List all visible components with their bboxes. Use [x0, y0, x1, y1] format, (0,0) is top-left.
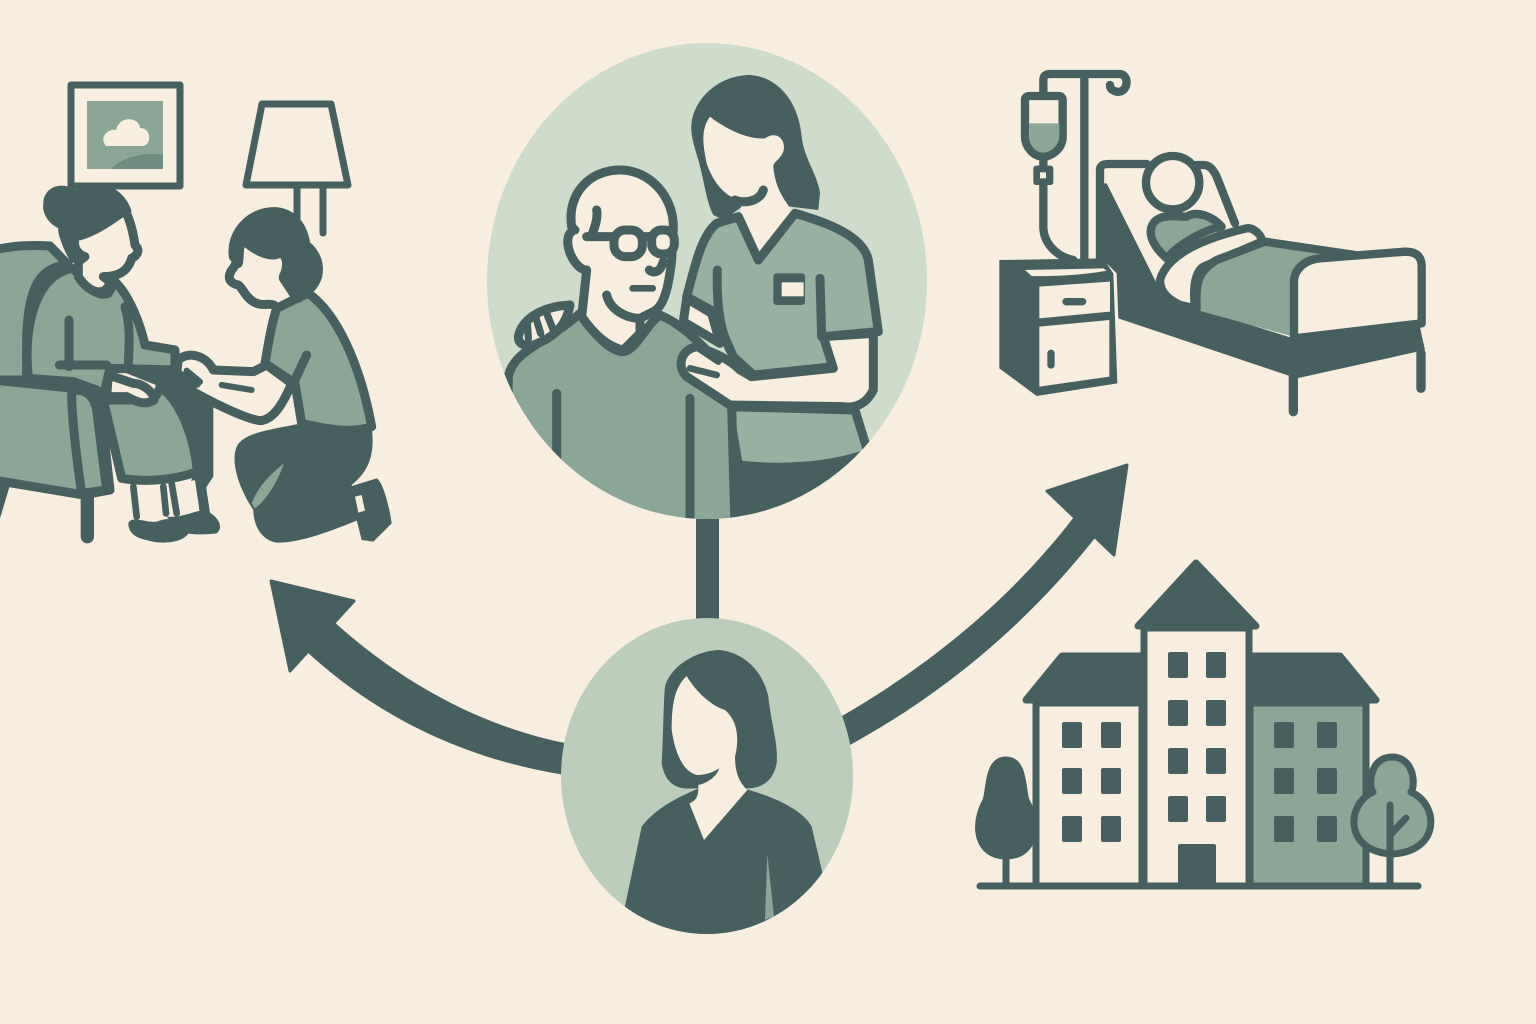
patient shirt lines	[557, 393, 690, 527]
caregiver shirt highlight	[765, 854, 774, 920]
caregiver arm and hand	[177, 355, 292, 421]
icon: IV stand	[1025, 74, 1127, 260]
armchair	[0, 245, 110, 537]
nurse arm behind patient	[683, 298, 720, 343]
glasses	[614, 230, 674, 257]
caregiver trousers	[235, 423, 373, 543]
illustration: hospital bed scene	[999, 74, 1425, 412]
nurse face and neck	[703, 117, 793, 260]
nurse trousers	[734, 454, 858, 518]
central tower	[1138, 563, 1256, 886]
ground line	[980, 882, 1418, 890]
caregiver body	[620, 788, 823, 940]
connector: caregiver to patient circle	[696, 500, 719, 630]
illustration: home care scene	[0, 184, 392, 543]
nurse scrub top	[687, 213, 878, 375]
arrow: toward home care	[271, 581, 565, 775]
seated woman skirt	[103, 387, 197, 480]
blanket fold	[1160, 228, 1262, 308]
icon: left tree	[977, 758, 1035, 886]
building wings and roof	[1026, 656, 1376, 886]
windows	[1062, 652, 1337, 842]
caregiver hair	[233, 212, 318, 298]
patient shirt	[507, 313, 735, 527]
icon: framed picture	[71, 85, 180, 186]
panel: patient and nurse circle	[487, 43, 927, 527]
patient face details	[587, 210, 663, 318]
caregiver sleeve line	[293, 355, 307, 383]
patient head	[568, 170, 673, 350]
footboard	[1294, 252, 1422, 338]
icon: bedside table	[999, 258, 1117, 396]
panel: caregiver circle	[561, 618, 853, 940]
seated woman hand	[107, 375, 154, 403]
nurse front arm	[681, 333, 873, 407]
shirt and sleeve lines	[59, 307, 129, 367]
seated woman hair	[43, 184, 132, 263]
seated woman dark lap	[110, 367, 213, 513]
hand detail lines	[187, 371, 252, 390]
seated woman legs	[133, 480, 205, 520]
caregiver face and neck	[672, 676, 747, 840]
illustration: care home building	[977, 563, 1431, 886]
seated woman shirt	[27, 268, 175, 397]
patient body	[1151, 214, 1222, 258]
nurse chin line	[735, 190, 763, 202]
caregiver hair	[662, 650, 777, 789]
scrub sleeve lines	[717, 270, 822, 350]
nurse hair	[691, 75, 820, 220]
bed frame	[1100, 164, 1425, 412]
arrow: toward hospital	[842, 465, 1127, 745]
icon: right tree	[1354, 757, 1431, 886]
caregiver head	[229, 238, 297, 308]
green blanket	[1196, 243, 1323, 337]
nurse finger lines	[690, 349, 718, 375]
seated woman head	[74, 210, 138, 292]
seated woman shoes	[128, 510, 220, 543]
patient mouth	[629, 285, 656, 292]
blanket outline	[1196, 242, 1355, 308]
name badge	[777, 277, 804, 302]
trousers highlight	[252, 463, 284, 508]
nurse hand on patient shoulder	[518, 305, 570, 345]
icon: floor lamp	[246, 104, 348, 233]
nurse scrub hem	[728, 407, 868, 467]
caregiver foot	[350, 478, 392, 542]
caregiver shirt	[265, 293, 372, 430]
patient head	[1146, 156, 1199, 209]
